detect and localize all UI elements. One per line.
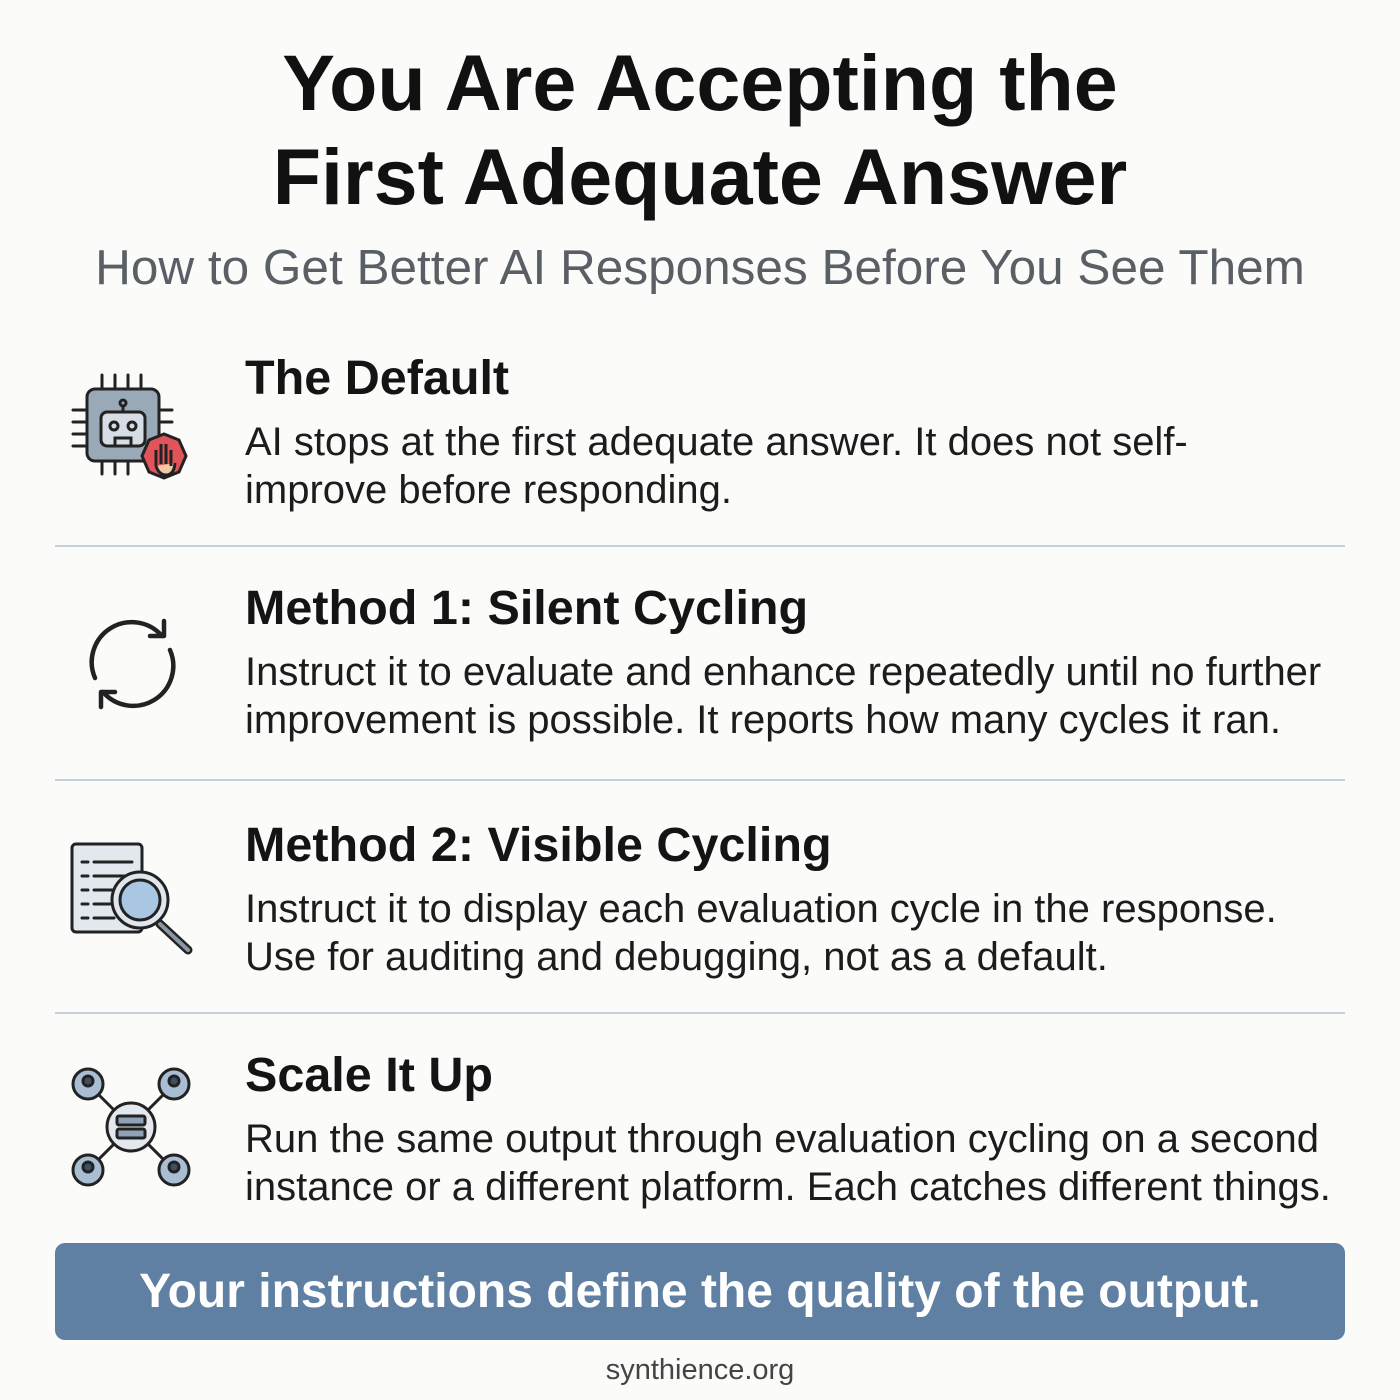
title: You Are Accepting the <box>282 38 1118 127</box>
heading: the default: The Default <box>245 351 509 405</box>
icon: network of users <box>72 1068 190 1186</box>
heading: method 2: Method 2: Visible Cycling <box>245 818 832 872</box>
icon: document with magnifier <box>70 842 192 954</box>
banner: Your instructions define the quality of the output. <box>139 1265 1261 1318</box>
text: default <box>245 420 1188 512</box>
text: method 1 <box>245 650 1321 742</box>
text: default: improve before responding. <box>245 468 732 512</box>
text: method 2 <box>245 887 1277 979</box>
footer: synthience.org <box>606 1354 794 1386</box>
text: method 1: improvement is possible. It reports how many cycles it ran. <box>245 698 1281 742</box>
text: scale <box>245 1117 1331 1209</box>
icon: cycle arrows <box>89 618 176 710</box>
text: scale: Run the same output through evaluation cycling on a second <box>245 1117 1319 1161</box>
text: method 1: Instruct it to evaluate and enhance repeatedly until no further <box>245 650 1321 694</box>
icon: robot chip with stop hand <box>72 374 188 480</box>
heading: scale it up: Scale It Up <box>245 1048 493 1102</box>
text: default: AI stops at the first adequate answer. It does not self- <box>245 420 1188 464</box>
text: method 2: Instruct it to display each evaluation cycle in the response. <box>245 887 1277 931</box>
heading: method 1: Method 1: Silent Cycling <box>245 581 808 635</box>
title <box>273 38 1127 221</box>
title: First Adequate Answer <box>273 132 1127 221</box>
banner <box>55 1243 1345 1340</box>
text: method 2: Use for auditing and debugging, not as a default. <box>245 935 1108 979</box>
subtitle: How to Get Better AI Responses Before You See Them <box>95 240 1305 295</box>
text: scale: instance or a different platform. Each catches different things. <box>245 1165 1331 1209</box>
